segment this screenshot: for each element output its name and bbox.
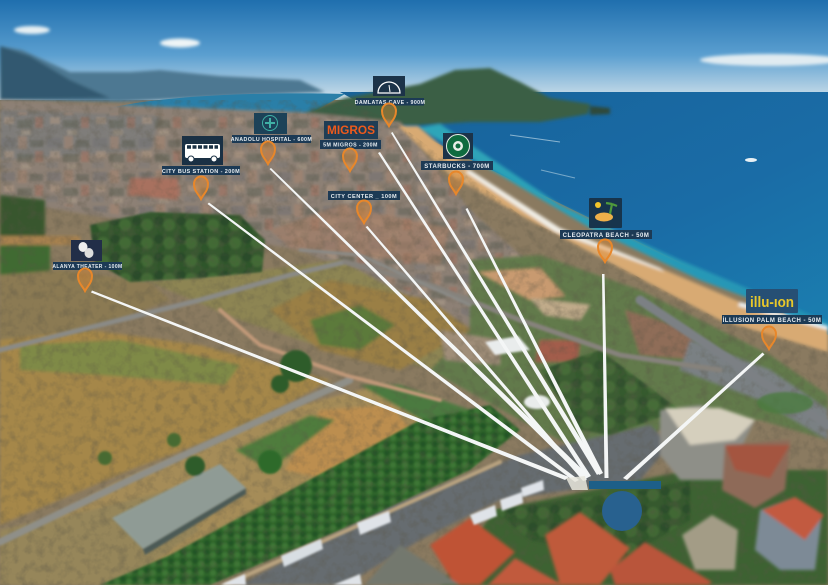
label: CLEOPATRA BEACH - 50M xyxy=(563,233,649,239)
city blocks xyxy=(0,112,545,330)
line: cave xyxy=(391,132,601,475)
pin xyxy=(449,172,463,194)
icon: Migros logo: MIGROS xyxy=(327,125,375,137)
lower-left field xyxy=(0,330,330,525)
banana strip xyxy=(100,405,520,585)
label: STARBUCKS - 700M xyxy=(424,164,490,170)
label: ANADOLU HOSPITAL - 600M xyxy=(231,137,312,143)
icon: bus xyxy=(182,136,223,165)
project marker xyxy=(589,481,661,531)
white canopies xyxy=(485,336,530,355)
location: Migros xyxy=(320,121,381,171)
pin xyxy=(382,104,396,126)
pin xyxy=(343,148,357,171)
city xyxy=(0,100,560,340)
label: DAMLATAŞ CAVE - 900M xyxy=(355,100,426,106)
pin xyxy=(598,240,612,262)
location: Cleopatra Beach xyxy=(560,198,652,262)
line: city center xyxy=(366,226,587,481)
project bar xyxy=(589,481,661,489)
pin xyxy=(261,142,275,164)
line: hospital xyxy=(270,168,589,480)
warehouse xyxy=(112,464,246,549)
label: CITY BUS STATION - 200M xyxy=(162,169,240,175)
location: City Bus Station xyxy=(162,136,240,199)
sea xyxy=(340,92,828,335)
buses xyxy=(357,511,391,535)
line: starbucks xyxy=(466,208,603,475)
location: City Center xyxy=(328,191,400,223)
line: cleopatra xyxy=(602,274,608,478)
forest xyxy=(90,212,265,282)
roads xyxy=(0,250,828,585)
icon: island xyxy=(589,198,622,228)
line: theater xyxy=(91,290,569,480)
line: migros xyxy=(378,152,591,478)
forest and left ground xyxy=(0,195,45,238)
icon: hospital xyxy=(254,113,287,134)
label: CITY CENTER _ 100M xyxy=(331,194,397,200)
icon: theater masks xyxy=(71,240,102,261)
location: Damlataş Cave xyxy=(355,76,426,126)
pin xyxy=(194,176,208,199)
location: Alanya Theater xyxy=(52,240,123,291)
project circle xyxy=(602,491,642,531)
pin xyxy=(78,268,92,291)
central resort xyxy=(430,255,828,460)
hill xyxy=(295,68,590,125)
line: illusion xyxy=(623,352,764,480)
label: ALANYA THEATER - 100M xyxy=(52,264,123,270)
resort trees xyxy=(540,350,680,435)
icon: gauge xyxy=(373,76,405,96)
location: Starbucks xyxy=(421,133,493,194)
lower right xyxy=(440,470,828,585)
label: İLLUSION PALM BEACH - 50M xyxy=(723,317,821,324)
location: Illusion Palm Beach xyxy=(722,289,822,349)
location: Anadolu Hospital xyxy=(231,113,312,164)
pin xyxy=(357,200,371,223)
connector lines xyxy=(91,132,764,482)
beach xyxy=(398,126,828,352)
pin xyxy=(762,326,776,349)
line: bus station xyxy=(208,202,579,482)
icon: Starbucks logo xyxy=(443,133,473,159)
focal white patch xyxy=(566,476,588,490)
lower road xyxy=(240,425,670,585)
icon: Illusion logo: illu-ıon xyxy=(750,294,794,311)
label: 5M MIGROS - 200M xyxy=(323,142,378,148)
